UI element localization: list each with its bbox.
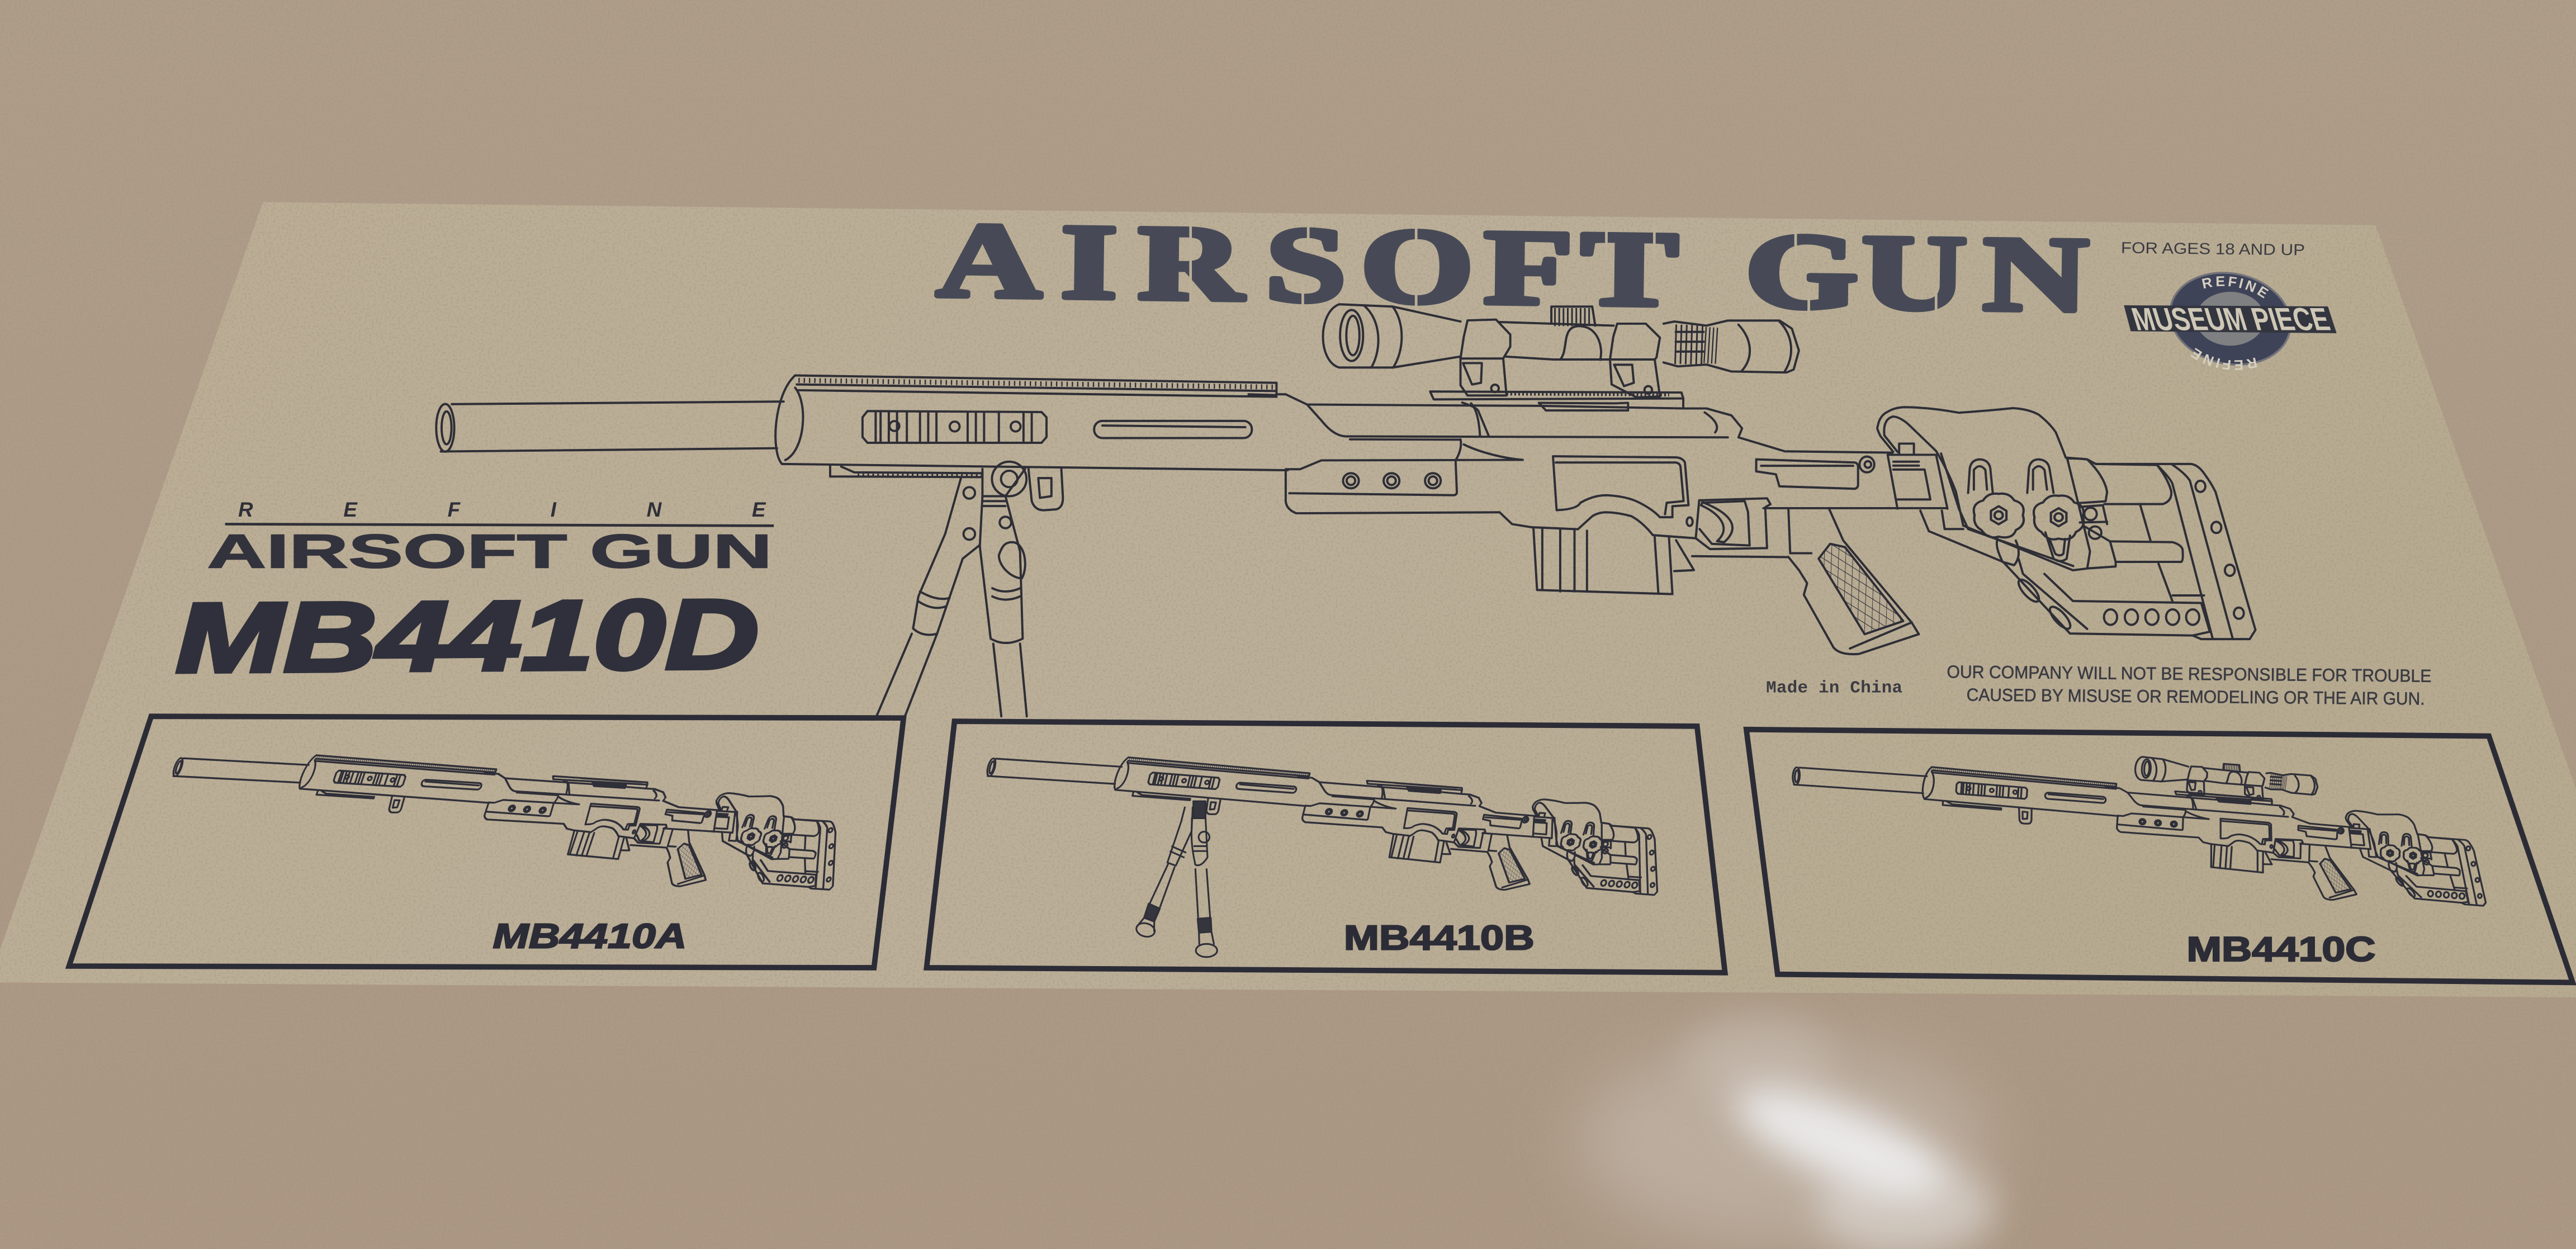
bipod MB4410B	[1135, 801, 1217, 957]
bipod	[877, 462, 1027, 716]
rifle MB4410B	[967, 747, 1680, 901]
logo: Museum Piece emblem	[2124, 272, 2337, 370]
heading: REFINE: R E F I N E	[238, 498, 766, 521]
heading: model MB4410D: MB4410D	[175, 579, 759, 693]
glare on plastic wrap	[1577, 1017, 1996, 1249]
label MB4410A: MB4410A	[493, 917, 686, 956]
logo: Museum Piece emblem: REFINE	[2201, 276, 2269, 299]
logo: Museum Piece emblem: REFINE	[2190, 348, 2257, 370]
heading rule	[225, 524, 774, 526]
panel: printed paper label	[0, 202, 2576, 997]
rifle MB4410A	[146, 747, 865, 896]
text: disclaimer: OUR COMPANY WILL NOT BE RESPONSIBLE FOR TROUBLE	[1947, 661, 2432, 686]
age notice: FOR AGES 18 AND UP	[2121, 239, 2305, 259]
panel: variant MB4410C	[1746, 730, 2573, 982]
rifle MB4410C with scope	[1787, 731, 2494, 911]
text: disclaimer: CAUSED BY MISUSE OR REMODELING OR THE AIR GUN.	[1967, 684, 2425, 709]
scope	[1323, 304, 1799, 398]
text: made in china: Made in China	[1766, 679, 1902, 698]
title stencil cuts	[1191, 217, 1936, 322]
panel: variant MB4410B	[926, 721, 1725, 973]
label MB4410B: MB4410B	[1344, 919, 1535, 958]
panel: variant MB4410A	[69, 716, 903, 968]
rifle body	[436, 375, 2256, 654]
label MB4410C: MB4410C	[2186, 930, 2375, 969]
text: disclaimer	[1947, 661, 2432, 709]
title: AIRSOFT GUN	[936, 201, 2089, 334]
heading: Airsoft Gun: AIRSOFT GUN	[207, 525, 772, 578]
logo: Museum Piece emblem: MUSEUM PIECE	[2128, 302, 2334, 337]
main rifle illustration with scope and bipod	[436, 304, 2256, 716]
